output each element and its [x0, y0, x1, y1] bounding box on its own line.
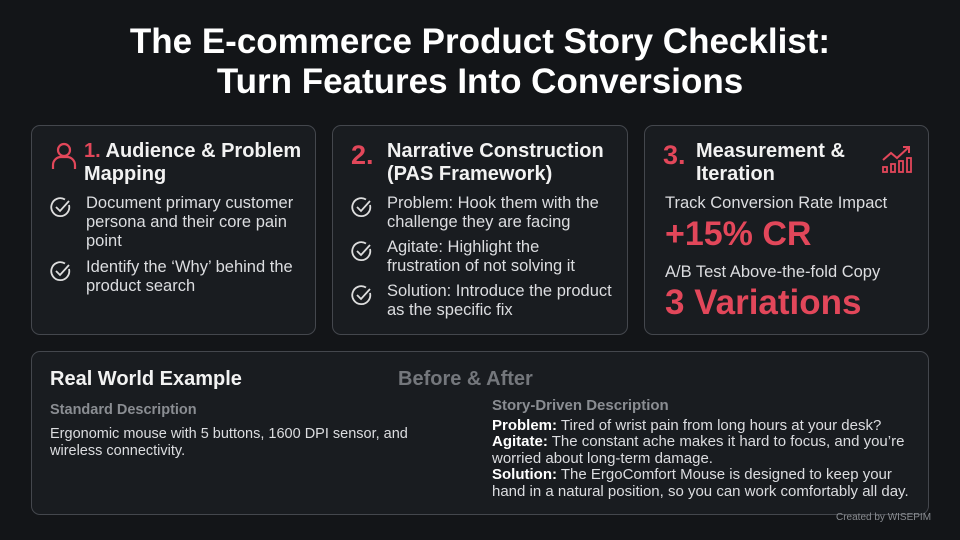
- standard description: [50, 402, 408, 459]
- title: [130, 22, 830, 101]
- panel: example: [31, 351, 929, 515]
- panel: measurement: [644, 125, 929, 335]
- heading: Iteration: [696, 163, 775, 185]
- heading: Measurement &: [696, 140, 845, 162]
- story description: Problem: Tired of wrist pain from long hours at your desk?: [492, 416, 881, 434]
- heading: 2.: [351, 140, 374, 170]
- checklist: [351, 194, 612, 319]
- heading: [351, 140, 604, 185]
- stat 1: Track Conversion Rate Impact: [665, 194, 887, 212]
- stat 2: A/B Test Above-the-fold Copy: [665, 263, 880, 281]
- checklist: Agitate: Highlight the: [387, 238, 539, 256]
- checklist: Identify the ‘Why’ behind the product search: [86, 258, 293, 295]
- heading: [84, 140, 301, 185]
- checklist: Solution: Introduce the product: [387, 282, 612, 300]
- stat 1: [665, 194, 888, 253]
- heading: 1. Audience & Problem: [84, 140, 301, 162]
- heading: [663, 140, 845, 185]
- footer credit: Created by WISEPIM: [836, 512, 931, 523]
- icon: person: [52, 142, 76, 169]
- story description: Solution: The ErgoComfort Mouse is designed to keep your hand in a natural position, so you can work comfortably all day.: [492, 466, 909, 500]
- standard description: Ergonomic mouse with 5 buttons, 1600 DPI sensor, and wireless connectivity.: [50, 426, 408, 459]
- heading: Narrative Construction: [387, 140, 604, 162]
- stat 2: [665, 263, 880, 322]
- story description: Agitate: The constant ache makes it hard to focus, and you’re worried about long-term damage.: [492, 433, 904, 466]
- heading: 3.: [663, 140, 686, 170]
- heading: (PAS Framework): [387, 163, 552, 185]
- panel: narrative: [332, 125, 628, 335]
- subheading: Before & After: [398, 368, 533, 390]
- title: The E-commerce Product Story Checklist:: [130, 22, 830, 61]
- checklist: as the specific fix: [387, 301, 513, 319]
- checklist: Document primary customer persona and their core pain point: [86, 194, 293, 250]
- checklist: [50, 194, 293, 295]
- story description: [492, 397, 909, 500]
- stat 2: 3 Variations: [665, 283, 861, 322]
- panel: audience: [31, 125, 316, 335]
- title: Turn Features Into Conversions: [217, 62, 743, 101]
- standard description: Standard Description: [50, 402, 197, 418]
- heading: Mapping: [84, 163, 166, 185]
- icon: growth chart: [882, 146, 912, 173]
- stat 1: +15% CR: [665, 215, 811, 253]
- checklist: Problem: Hook them with the challenge they are facing: [387, 194, 599, 231]
- checklist: frustration of not solving it: [387, 257, 575, 275]
- heading: Real World Example: [50, 368, 242, 390]
- story description: Story-Driven Description: [492, 397, 669, 414]
